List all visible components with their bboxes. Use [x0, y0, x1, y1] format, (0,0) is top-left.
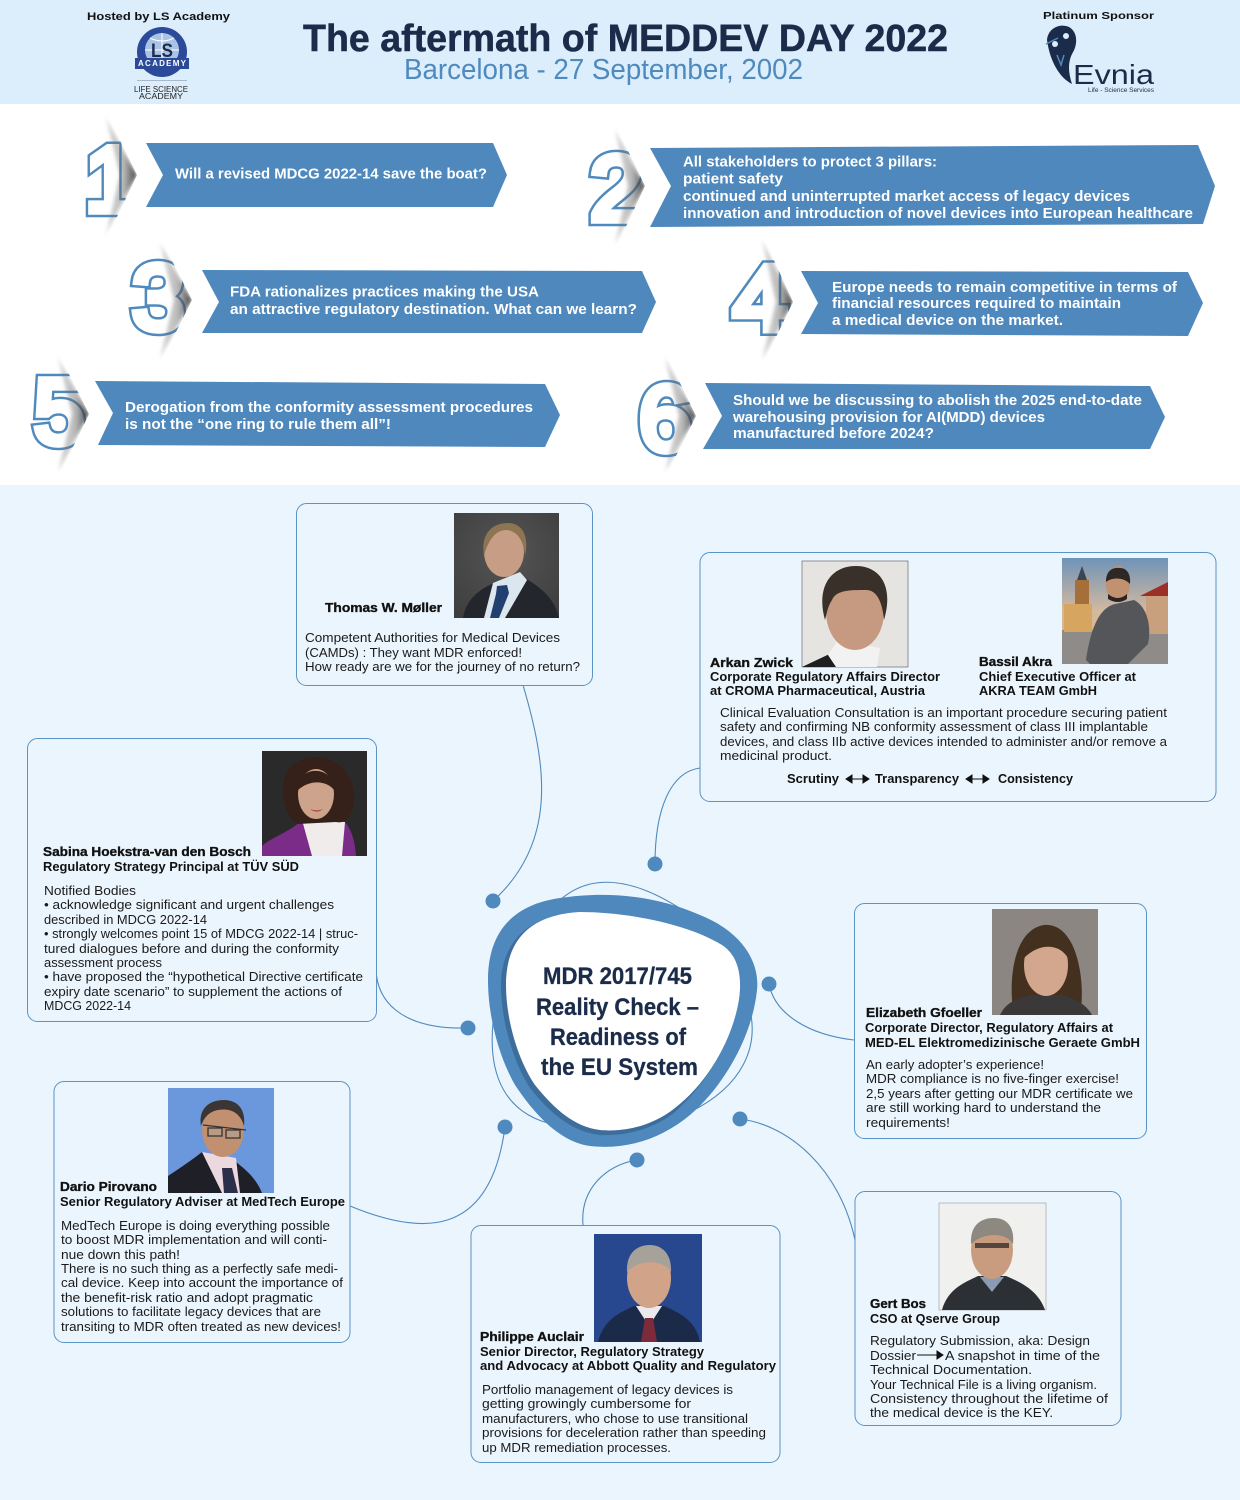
name and role: Arkan — [710, 655, 940, 698]
takeaway 2 — [590, 124, 1215, 250]
banner text 3: an attractive regulatory destination. What can we learn? — [230, 302, 637, 318]
statement: Philippe — [482, 1382, 766, 1455]
takeaway 6 — [639, 352, 1165, 478]
panel: Sabina Hoekstra-van den Bosch — [28, 738, 376, 1022]
statement: Gert: the medical device is the KEY. — [870, 1405, 1053, 1420]
number 4: 4 — [733, 248, 787, 350]
name and role: Sabina — [43, 844, 299, 874]
portrait: Gert — [939, 1203, 1046, 1310]
banner text 6: manufactured before 2024? — [733, 426, 934, 442]
panel: Philippe Auclair — [471, 1226, 780, 1462]
banner text 4: Europe needs to remain competitive in terms of — [832, 280, 1177, 296]
portrait: Bassil — [1062, 558, 1168, 664]
panel: Elizabeth Gfoeller — [854, 904, 1146, 1138]
name and role: Gert: Gert Bos — [870, 1296, 926, 1311]
name and role: Bassil: Bassil Akra — [979, 654, 1053, 669]
banner text 5 — [125, 400, 533, 433]
lower section background — [0, 485, 1240, 1500]
banner text 2 — [683, 154, 1193, 222]
statement: Clinical Evaluation Consultation: Clinical Evaluation Consultation is an important procedure securing patient — [720, 705, 1167, 720]
central title: MDR 2017/745 — [543, 963, 692, 990]
statement: Thomas: How ready are we for the journey of no return? — [305, 659, 580, 674]
statement: Thomas: Competent Authorities for Medical Devices — [305, 630, 561, 645]
panel: Thomas W. Møller — [296, 504, 592, 686]
statement: Sabina — [44, 883, 363, 1013]
statement: Dario: the benefit-risk ratio and adopt pragmatic — [61, 1290, 314, 1305]
icon: LS Academy logo — [134, 27, 189, 101]
mind map connectors — [350, 685, 855, 1240]
scrutiny transparency consistency row: Consistency — [998, 771, 1074, 786]
statement: Sabina: described in MDCG 2022-14 — [44, 912, 207, 927]
banner text 2: continued and uninterrupted market access of legacy devices — [683, 189, 1130, 205]
banner text 5: is not the “one ring to rule them all”! — [125, 417, 391, 433]
number 5: 5 — [34, 361, 84, 463]
statement: Elizabeth: An early adopter’s experience! — [866, 1057, 1044, 1072]
statement: Dario: There is no such thing as a perfectly safe medi- — [61, 1261, 338, 1276]
banner text 2: innovation and introduction of novel devices into European healthcare — [683, 206, 1193, 222]
statement: Dario: to boost MDR implementation and will conti- — [61, 1232, 327, 1247]
statement: Elizabeth: requirements! — [866, 1115, 950, 1130]
statement: Clinical Evaluation Consultation: devices, and class IIb active devices intended to administer and/or remove a — [720, 734, 1168, 749]
statement: Sabina: assessment process — [44, 955, 162, 970]
name and role: Arkan: Arkan Zwick — [710, 655, 794, 670]
name and role: Elizabeth: MED-EL Elektromedizinische Geraete GmbH — [865, 1035, 1140, 1050]
statement: Gert — [870, 1333, 1108, 1420]
statement: Sabina: Notified Bodies — [44, 883, 137, 898]
statement: Sabina: • strongly welcomes point 15 of MDCG 2022-14 | struc- — [44, 926, 358, 941]
host label: Hosted by LS Academy — [87, 11, 231, 23]
statement: Philippe: getting growingly cumbersome for — [482, 1396, 692, 1411]
name and role: Sabina: Sabina Hoekstra-van den Bosch — [43, 844, 251, 859]
arrow banner 5 — [95, 381, 560, 447]
name and role: Gert — [870, 1296, 1000, 1326]
number 3: 3 — [132, 247, 184, 349]
number 1: 1 — [85, 129, 135, 231]
name and role: Sabina: Regulatory Strategy Principal at TÜV SÜD — [43, 859, 299, 874]
statement: Clinical Evaluation Consultation: safety and confirming NB conformity assessment of class III implantable — [720, 719, 1148, 734]
central title: Reality Check – — [536, 994, 699, 1021]
takeaway 4 — [733, 234, 1203, 366]
name and role: Philippe — [480, 1329, 777, 1373]
number 4: 4 — [733, 248, 787, 350]
panel: Arkan Zwick and Bassil Akra — [700, 552, 1216, 802]
icon: double arrow — [966, 775, 989, 783]
title: The aftermath of MEDDEV DAY 2022 — [303, 18, 948, 60]
arrow banner 2 — [650, 145, 1215, 227]
statement: Dario: nue down this path! — [61, 1247, 180, 1262]
name and role: Philippe: and Advocacy at Abbott Quality and Regulatory — [480, 1358, 777, 1373]
statement: Gert: Technical Documentation. — [870, 1362, 1032, 1377]
banner text 3 — [230, 284, 637, 318]
name and role: Arkan: at CROMA Pharmaceutical, Austria — [710, 683, 926, 698]
name and role: Philippe: Philippe Auclair — [480, 1329, 584, 1344]
banner text 4: a medical device on the market. — [832, 313, 1063, 329]
icon: Evnia logo: Evnia — [1073, 59, 1154, 90]
number 1: 1 — [85, 129, 135, 231]
statement: Gert: A snapshot in time of the — [945, 1348, 1100, 1363]
number 6: 6 — [639, 368, 691, 470]
statement: Gert: Consistency throughout the lifetime of — [870, 1391, 1108, 1406]
banner text 3: FDA rationalizes practices making the USA — [230, 284, 540, 300]
statement: Sabina: tured dialogues before and during the conformity — [44, 941, 340, 956]
takeaway 3 — [132, 237, 656, 364]
icon: Evnia logo — [1046, 26, 1154, 94]
portrait: Philippe — [594, 1234, 702, 1342]
portrait: Elizabeth — [992, 909, 1098, 1015]
number 5: 5 — [34, 361, 84, 463]
name and role: Elizabeth: Elizabeth Gfoeller — [866, 1005, 982, 1020]
statement: Dario — [61, 1218, 343, 1334]
portrait: Thomas — [454, 513, 559, 618]
icon: LS Academy logo: LS — [151, 41, 173, 62]
statement: Philippe: provisions for deceleration rather than speeding — [482, 1425, 766, 1440]
name and role: Gert: CSO at Qserve Group — [870, 1311, 1000, 1326]
name and role: Dario: Senior Regulatory Adviser at MedTech Europe — [60, 1194, 345, 1209]
name and role: Philippe: Senior Director, Regulatory Strategy — [480, 1344, 705, 1359]
number 2: 2 — [590, 138, 642, 240]
statement: Elizabeth: MDR compliance is no five-finger exercise! — [866, 1071, 1119, 1086]
statement: Dario: cal device. Keep into account the importance of — [61, 1275, 343, 1290]
scrutiny transparency consistency row: Scrutiny — [787, 771, 840, 786]
statement: Gert: Your Technical File is a living organism. — [870, 1377, 1097, 1392]
number 2: 2 — [590, 138, 642, 240]
arrow banner 3 — [202, 270, 656, 333]
takeaway 5 — [34, 352, 560, 478]
name and role: Elizabeth: Corporate Director, Regulatory Affairs at — [865, 1020, 1114, 1035]
takeaway 1 — [85, 112, 507, 240]
icon: double arrow — [846, 775, 869, 783]
central topic blob — [488, 895, 757, 1147]
statement: Clinical Evaluation Consultation — [720, 705, 1168, 763]
statement: Philippe: manufacturers, who chose to use transitional — [482, 1411, 748, 1426]
portrait: Arkan — [802, 561, 908, 667]
statement: Thomas — [305, 630, 580, 674]
name and role: Dario: Dario Pirovano — [60, 1179, 157, 1194]
subtitle: Barcelona - 27 September, 2002 — [404, 54, 803, 86]
central title: the EU System — [541, 1054, 698, 1081]
panel: Dario Pirovano — [54, 1082, 350, 1342]
central title: Readiness of — [550, 1024, 687, 1051]
statement: Gert: Regulatory Submission, aka: Design — [870, 1333, 1090, 1348]
panel: Gert Bos — [855, 1192, 1121, 1426]
central title — [536, 963, 699, 1081]
name and role: Arkan: Corporate Regulatory Affairs Director — [710, 669, 940, 684]
statement: Dario: transiting to MDR often treated as new devices! — [61, 1319, 341, 1334]
scrutiny transparency consistency row — [787, 771, 1074, 786]
statement: Gert: Dossier — [870, 1348, 917, 1363]
statement: Elizabeth: 2,5 years after getting our MDR certificate we — [866, 1086, 1133, 1101]
statement: Philippe: up MDR remediation processes. — [482, 1440, 671, 1455]
scrutiny transparency consistency row: Transparency — [875, 771, 960, 786]
statement: Sabina: • have proposed the “hypothetical Directive certificate — [44, 969, 363, 984]
name and role: Dario — [60, 1179, 345, 1209]
banner text 6: Should we be discussing to abolish the 2025 end-to-date — [733, 393, 1142, 409]
name and role: Elizabeth — [865, 1005, 1140, 1050]
name and role: Bassil: AKRA TEAM GmbH — [979, 683, 1097, 698]
name and role: Bassil: Chief Executive Officer at — [979, 669, 1137, 684]
portrait: Dario — [168, 1088, 274, 1193]
sponsor label: Platinum Sponsor — [1043, 10, 1154, 22]
statement: Elizabeth — [866, 1057, 1133, 1130]
name and role: Bassil — [979, 654, 1137, 698]
name: Thomas: Thomas W. Møller — [325, 600, 442, 615]
statement: Philippe: Portfolio management of legacy devices is — [482, 1382, 734, 1397]
number 3: 3 — [132, 247, 184, 349]
banner text 2: patient safety — [683, 172, 783, 188]
banner text 5: Derogation from the conformity assessment procedures — [125, 400, 533, 416]
icon: LS Academy logo: ACADEMY — [138, 59, 187, 68]
header band — [0, 0, 1240, 104]
banner text 4: financial resources required to maintain — [832, 296, 1121, 312]
statement: Dario: MedTech Europe is doing everything possible — [61, 1218, 330, 1233]
statement: Elizabeth: are still working hard to understand the — [866, 1100, 1101, 1115]
statement: Sabina: expiry date scenario” to supplement the actions of — [44, 984, 342, 999]
statement: Sabina: MDCG 2022-14 — [44, 998, 131, 1013]
arrow banner 4 — [801, 271, 1203, 336]
arrow banner 1 — [146, 143, 507, 207]
banner text 4 — [832, 280, 1177, 329]
statement: Sabina: • acknowledge significant and urgent challenges — [44, 897, 335, 912]
banner text 6 — [732, 393, 1142, 442]
icon: Evnia logo: Life - Science Services — [1088, 88, 1154, 94]
banner text 2: All stakeholders to protect 3 pillars: — [683, 154, 937, 170]
statement: Dario: solutions to facilitate legacy devices that are — [61, 1304, 321, 1319]
statement: Clinical Evaluation Consultation: medicinal product. — [720, 748, 832, 763]
banner text 1: Will a revised MDCG 2022-14 save the boat? — [175, 166, 487, 182]
banner text 6: warehousing provision for AI(MDD) devices — [732, 410, 1045, 426]
portrait: Sabina — [262, 751, 367, 856]
icon: arrow — [917, 1351, 943, 1359]
statement: Thomas: (CAMDs) : They want MDR enforced! — [305, 645, 522, 660]
icon: LS Academy logo: LIFE SCIENCE — [134, 85, 188, 94]
number 6: 6 — [639, 368, 691, 470]
icon: LS Academy logo: ACADEMY — [139, 92, 184, 101]
arrow banner 6 — [703, 383, 1165, 449]
